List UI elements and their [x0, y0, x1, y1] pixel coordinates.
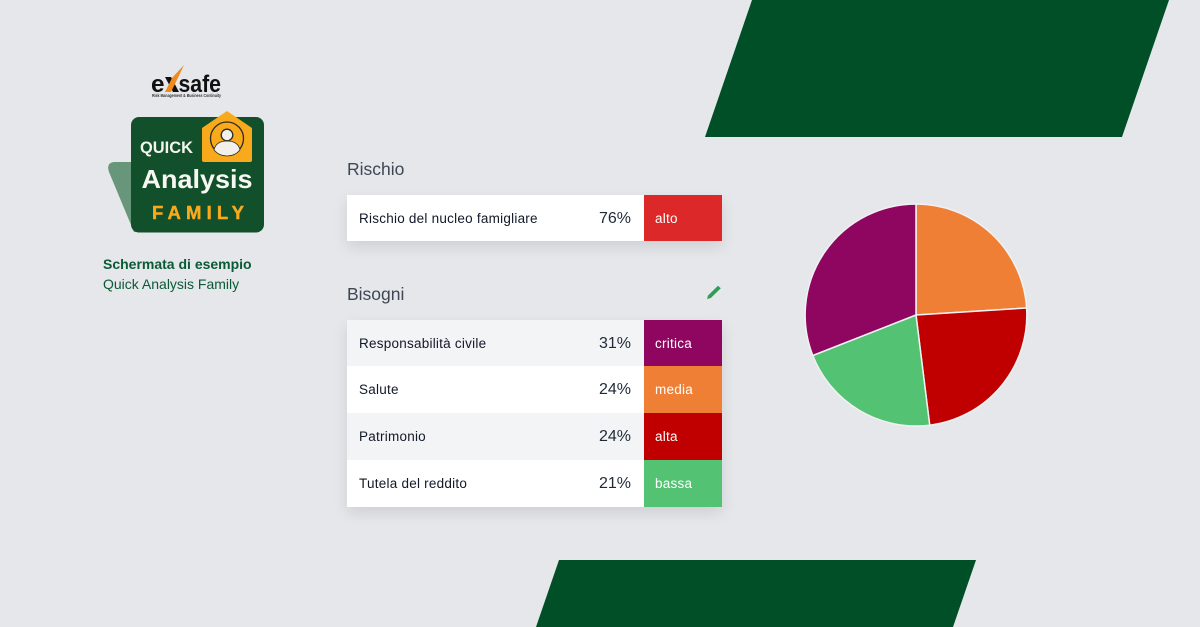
heading: Bisogni: Bisogni	[347, 284, 404, 304]
badge text: FAMILY: FAMILY	[152, 202, 245, 223]
row: Rischio del nucleo famigliare	[347, 194, 722, 241]
badge text: QUICK: QUICK	[140, 138, 194, 157]
row: Responsabilità civile: 31%	[599, 334, 631, 352]
slice: alta 24%	[916, 308, 1027, 425]
caption: Quick Analysis Family	[103, 276, 239, 292]
icon: pencil	[707, 286, 721, 299]
row: Responsabilità civile	[347, 320, 722, 366]
slice: bassa 21%	[813, 315, 930, 426]
row: Patrimonio: Patrimonio	[359, 429, 426, 444]
table: Rischio	[347, 194, 722, 241]
caption	[103, 256, 252, 292]
row: Tutela del reddito: bassa	[655, 476, 692, 491]
row: Salute: 24%	[599, 381, 631, 398]
row: Tutela del reddito: 21%	[599, 475, 631, 492]
slice: critica 31%	[805, 204, 916, 356]
row: Patrimonio: alta	[655, 429, 678, 444]
logo: eXsafe: safe	[178, 71, 221, 98]
heading: Rischio: Rischio	[347, 159, 404, 179]
badge back tab	[108, 162, 140, 232]
badge text: Analysis: Analysis	[142, 164, 252, 194]
row: Salute: media	[655, 382, 693, 397]
caption: Schermata di esempio	[103, 256, 252, 272]
pie chart	[804, 204, 1028, 426]
row: Tutela del reddito	[347, 460, 722, 506]
badge body	[131, 117, 264, 232]
table: Bisogni	[347, 320, 722, 506]
row: Salute	[347, 366, 722, 413]
row: Rischio del nucleo famigliare: 76%	[599, 210, 631, 226]
row: Tutela del reddito: Tutela del reddito	[359, 476, 467, 491]
row: Patrimonio	[347, 413, 722, 460]
row: Responsabilità civile: critica	[655, 336, 692, 350]
row: Rischio del nucleo famigliare: Rischio del nucleo famigliare	[359, 210, 538, 226]
row: Responsabilità civile: Responsabilità civile	[359, 336, 486, 350]
badge: Quick Analysis Family	[108, 111, 264, 232]
icon: house with person	[202, 111, 252, 162]
row: Salute: Salute	[359, 382, 399, 397]
row: Patrimonio: 24%	[599, 428, 631, 445]
slice: media 24%	[916, 204, 1027, 315]
logo: eXsafe: e	[151, 71, 164, 98]
row: Rischio del nucleo famigliare: alto	[655, 210, 678, 226]
logo: eXsafe	[151, 65, 221, 98]
